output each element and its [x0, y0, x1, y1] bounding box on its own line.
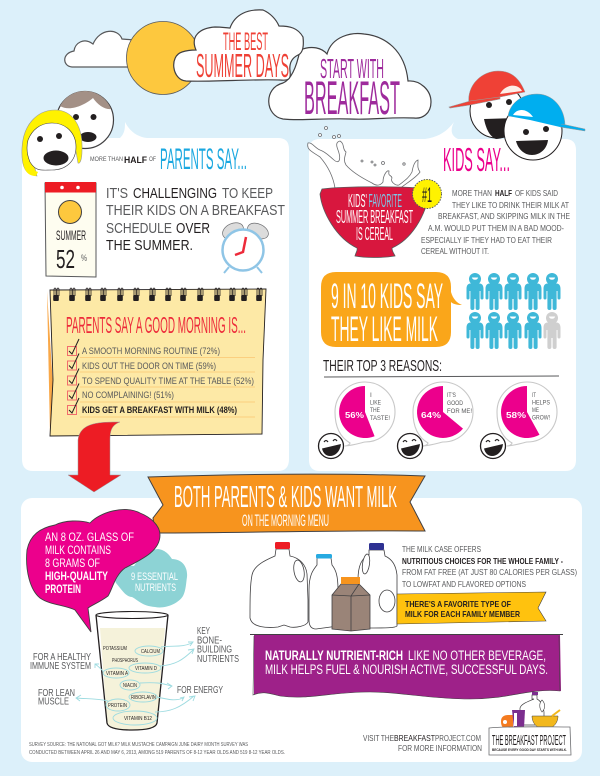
banner: favorite type of milk	[397, 592, 546, 624]
label: key bone-building nutrients	[197, 626, 239, 665]
pie: 58% it helps me grow: ME	[532, 407, 539, 414]
pie: 56% i like the taste: I	[370, 392, 372, 399]
text: milk case offers	[402, 545, 577, 589]
text: PARENTS SAY...	[160, 143, 247, 176]
spiral binding	[53, 288, 262, 301]
text: kids paragraph: HALF	[495, 188, 512, 198]
banner: naturally nutrient-rich: LIKE NO OTHER BEVERAGE,	[408, 648, 546, 663]
callout: 8 grams of protein: HIGH-QUALITY	[45, 569, 108, 583]
illustration: milk glass with nutrients: NIACIN	[123, 683, 137, 689]
text: kids paragraph	[421, 188, 570, 256]
banner: favorite type of milk: THERE'S A FAVORITE TYPE OF	[405, 600, 511, 609]
text: visit website: VISIT THE	[363, 734, 394, 743]
text: PARENTS SAY A GOOD MORNING IS...	[66, 312, 246, 338]
pie: 58% it helps me grow: HELPS	[532, 400, 551, 406]
icon: calendar 52%: 52	[56, 244, 75, 274]
banner: both parents and kids want milk: ON THE MORNING MENU	[242, 511, 329, 530]
text: kids paragraph: THEY LIKE TO DRINK THEIR MILK AT	[452, 200, 569, 210]
cloud: the best summer days: THE BEST	[223, 28, 268, 56]
text: survey source: CONDUCTED BETWEEN APRIL 26 AND MAY 6, 2013, AMONG 519 PARENTS OF 8-12 YEAR OLDS AND 519 8-12 YEAR OLDS.	[29, 750, 285, 756]
label: for a healthy immune system	[30, 652, 91, 672]
illustration: milk glass with nutrients: VITAMIN D	[135, 666, 157, 672]
text: milk case offers: THE MILK CASE OFFERS	[402, 545, 481, 554]
text: challenging statement: THE SUMMER.	[106, 237, 193, 254]
cloud: the best summer days	[174, 10, 303, 81]
icon: calendar 52%: SUMMER	[56, 227, 86, 243]
text: challenging statement: THEIR KIDS ON A BREAKFAST	[106, 202, 285, 219]
panel: kids say	[309, 122, 576, 471]
banner: favorite type of milk: MILK FOR EACH FAMILY MEMBER	[405, 610, 520, 619]
icon: kid with blue cap	[504, 94, 585, 160]
pie: 64% it's good for me: FOR ME!	[447, 408, 472, 415]
icon: kid with red cap	[449, 71, 525, 139]
icon: sun	[126, 22, 200, 94]
nutrient callout lines	[76, 642, 195, 725]
pie: 56% i like the taste: THE	[370, 407, 381, 414]
illustration: milk splash	[308, 126, 420, 190]
text: visit website: FOR MORE INFORMATION	[398, 744, 482, 753]
icon: alarm clock	[220, 220, 271, 273]
text: kids paragraph: ESPECIALLY IF THEY HAD TO EAT THEIR	[421, 235, 552, 245]
label: for energy: FOR ENERGY	[177, 685, 223, 696]
illustration: cereal bowl: IS CEREAL	[356, 224, 393, 244]
text: SUMMER DAYS	[196, 47, 289, 84]
notepad: good morning checklist: TO SPEND QUALITY TIME AT THE TABLE (52%)	[82, 376, 254, 387]
text: challenging statement: CHALLENGING	[133, 185, 217, 202]
text: kids paragraph: OF KIDS SAID	[515, 188, 558, 198]
icon: dad face	[56, 91, 114, 148]
banner: naturally nutrient-rich	[250, 634, 563, 699]
illustration: milk glass with nutrients: CALCIUM	[141, 649, 160, 655]
pie: 58% it helps me grow: GROW!	[532, 414, 550, 422]
text: kids paragraph: CEREAL WITHOUT IT.	[421, 246, 489, 256]
text: challenging statement: IT'S	[106, 185, 128, 202]
illustration: milk glass with nutrients: RIBOFLAVIN	[131, 695, 156, 701]
illustration: milk glass with nutrients: PROTEIN	[108, 703, 127, 709]
text: milk case offers: FROM FAT FREE (AT JUST 80 CALORIES PER GLASS)	[402, 568, 577, 577]
text: THEY LIKE MILK	[331, 310, 438, 349]
text: SUMMER BREAKFAST	[336, 207, 413, 227]
illustration: milk glass with nutrients: PHOSPHORUS	[112, 658, 138, 664]
notepad: good morning checklist	[47, 288, 266, 436]
pie: 56% i like the taste: 56%	[345, 410, 364, 420]
logo: the breakfast project: BECAUSE EVERY GOOD DAY STARTS WITH MILK.	[492, 748, 567, 752]
text: challenging statement	[106, 185, 285, 254]
callout: 9 essential nutrients: 9 ESSENTIAL	[131, 571, 178, 583]
label: key bone-building nutrients: KEY	[197, 626, 210, 637]
text: milk case offers: TO LOWFAT AND FLAVORED OPTIONS	[402, 580, 526, 589]
callout: 8 grams of protein: AN 8 OZ. GLASS OF	[45, 530, 134, 544]
text: visit website: PROJECT.COM	[435, 734, 481, 743]
label: for lean muscle	[38, 688, 75, 708]
pie: 56% i like the taste: LIKE	[370, 400, 382, 406]
badge: number one: #1	[422, 184, 432, 207]
illustration: milk containers	[250, 542, 397, 631]
banner: both parents and kids want milk	[148, 474, 425, 533]
text: challenging statement: OVER	[176, 220, 210, 237]
icon: mom face	[22, 110, 82, 176]
label: for a healthy immune system: IMMUNE SYSTEM	[30, 661, 91, 672]
callout: 8 grams of protein: 8 GRAMS OF	[45, 556, 100, 570]
icon: small cloud	[65, 31, 135, 67]
pie: 58% it helps me grow: IT	[532, 392, 536, 399]
text: challenging statement: TO KEEP	[222, 185, 273, 202]
pie: 64% it's good for me: GOOD	[447, 400, 463, 407]
banner: naturally nutrient-rich: NATURALLY NUTRIENT-RICH	[265, 648, 403, 663]
label: key bone-building nutrients: BONE-	[197, 636, 222, 646]
callout: 8 grams of protein	[27, 510, 160, 632]
text: more than half of	[90, 155, 156, 166]
callout: 8 grams of protein: PROTEIN	[45, 582, 81, 596]
callout: 8 grams of protein: MILK CONTAINS	[45, 543, 111, 557]
pie: 64% it's good for me: IT'S	[447, 392, 457, 399]
text: kids paragraph: MORE THAN	[452, 188, 492, 198]
pie: 58% it helps me grow	[480, 382, 557, 458]
text: visit website	[363, 734, 482, 753]
icon: calendar 52%	[45, 182, 96, 277]
text: visit website: BREAKFAST	[394, 734, 435, 743]
illustration: milk glass with nutrients: VITAMIN A	[106, 671, 128, 677]
illustration: cereal bowl: KIDS'	[348, 191, 367, 211]
text: challenging statement: SCHEDULE	[106, 220, 172, 237]
notepad: good morning checklist: KIDS OUT THE DOOR ON TIME (59%)	[82, 361, 216, 372]
label: for lean muscle: FOR LEAN	[38, 688, 75, 699]
pie: 58% it helps me grow: 58%	[506, 410, 527, 420]
cloud: start with breakfast	[269, 34, 431, 120]
badge: number one	[412, 180, 442, 208]
illustration: cereal bowl: FAVORITE	[368, 191, 402, 211]
notepad: good morning checklist: KIDS GET A BREAKFAST WITH MILK (48%)	[82, 405, 237, 416]
callout: 9 in 10 kids say they like milk	[321, 272, 462, 349]
illustration: cereal bowl	[320, 187, 430, 258]
illustration: milk glass with nutrients: VITAMIN B12	[124, 716, 152, 722]
logo: the breakfast project	[489, 692, 571, 755]
illustration: milk glass with nutrients: POTASSIUM	[103, 646, 127, 652]
label: for lean muscle: MUSCLE	[38, 696, 69, 708]
callout: 9 essential nutrients: NUTRIENTS	[135, 582, 176, 594]
pie: 64% it's good for me	[398, 382, 473, 458]
heading: their top 3 reasons: THEIR TOP 3 REASONS:	[323, 358, 442, 375]
text: kids paragraph: A.M. WOULD PUT THEM IN A BAD MOOD-	[428, 223, 564, 233]
pictogram: nine of ten kids	[466, 273, 560, 349]
panel: parents say	[22, 122, 289, 471]
text: more than half of: OF	[149, 156, 156, 163]
label: for a healthy immune system: FOR A HEALTHY	[33, 652, 91, 663]
text: milk case offers: NUTRITIOUS CHOICES FOR THE WHOLE FAMILY -	[402, 557, 563, 566]
pie: 64% it's good for me: 64%	[421, 410, 442, 420]
illustration: milk glass with nutrients	[76, 612, 195, 730]
label: key bone-building nutrients: NUTRIENTS	[197, 654, 239, 665]
text: more than half of: HALF	[124, 155, 147, 166]
pie: 56% i like the taste: TASTE!	[370, 415, 390, 422]
callout: 9 essential nutrients	[115, 549, 187, 607]
pie: 56% i like the taste	[318, 382, 395, 458]
text: survey source: SURVEY SOURCE: THE NATIONAL GOT MILK? MILK MUSTACHE CAMPAIGN JUNE DAIRY MONTH SURVEY WAS	[29, 742, 249, 748]
notepad: good morning checklist: NO COMPLAINING! (51%)	[82, 390, 174, 401]
text: more than half of: MORE THAN	[90, 156, 123, 163]
notepad: good morning checklist: A SMOOTH MORNING ROUTINE (72%)	[82, 346, 220, 357]
label: key bone-building nutrients: BUILDING	[197, 644, 232, 656]
text: BREAKFAST	[304, 71, 400, 124]
text: survey source	[29, 742, 285, 756]
arrow: red down arrow	[68, 422, 121, 492]
panel: both want milk	[21, 498, 582, 762]
text: kids paragraph: BREAKFAST, AND SKIPPING MILK IN THE	[438, 211, 570, 221]
cloud: start with breakfast: START WITH	[320, 53, 384, 84]
icon: calendar 52%: %	[81, 253, 87, 263]
